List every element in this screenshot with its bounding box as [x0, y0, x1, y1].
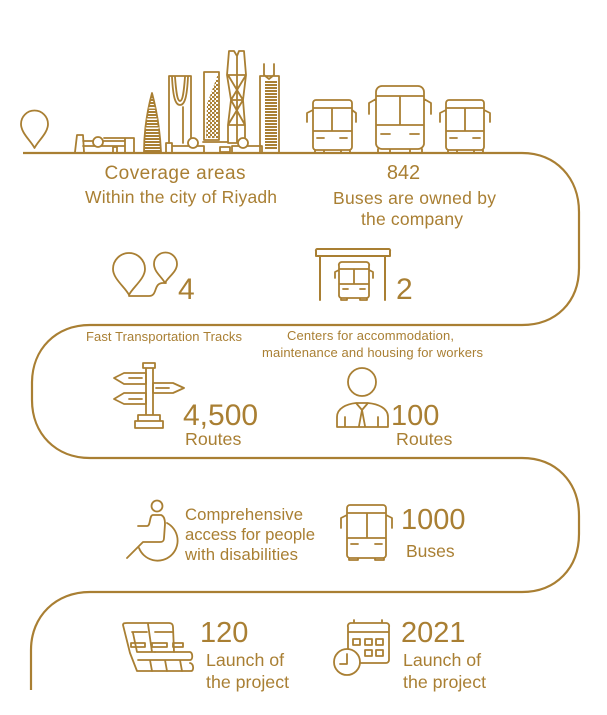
text: launch of the project: [206, 650, 289, 692]
number: 2021: 2021: [401, 617, 466, 649]
number: 1000: 1000: [401, 504, 466, 536]
icon: bus seats: [123, 623, 193, 671]
icon: three buses: [307, 86, 490, 152]
icon: bus depot: [316, 249, 390, 300]
number: 842: 842: [387, 162, 420, 184]
icon: two pins with track: [113, 252, 177, 296]
winding route line: [23, 153, 579, 690]
text: launch of the project: the project: [403, 672, 486, 692]
bus left: [307, 100, 356, 152]
text: comprehensive access: [184, 505, 315, 564]
text: within the city of Riyadh: Within the city of Riyadh: [85, 187, 277, 207]
text: launch of the project: Launch of: [403, 650, 481, 670]
number: 100: 100: [391, 400, 439, 432]
text: launch of the project: the project: [206, 672, 289, 692]
text: comprehensive access: Comprehensive: [185, 505, 303, 524]
icon: wheelchair user: [127, 500, 178, 561]
label: routes: Routes: [185, 429, 241, 449]
label: buses: Buses: [406, 541, 455, 561]
text: launch of the project: Launch of: [206, 650, 284, 670]
bus centre: [369, 86, 431, 152]
number: 4,500: 4,500: [183, 399, 258, 432]
label: centers for accommodation: [262, 328, 484, 360]
icon: calendar and clock: [334, 620, 389, 675]
label: centers for accommodation: Centers for accommodation,: [287, 328, 454, 343]
text: comprehensive access: access for people: [185, 525, 315, 544]
number: 2: 2: [396, 273, 413, 306]
text: comprehensive access: with disabilities: [184, 545, 298, 564]
label: fast transportation tracks: Fast Transportation Tracks: [86, 329, 242, 344]
icon: signpost: [114, 363, 184, 428]
text: buses are owned by the company: Buses are owned by: [333, 188, 496, 208]
label: routes: Routes: [396, 429, 452, 449]
number: 4: 4: [178, 273, 195, 306]
heading: coverage areas: Coverage areas: [104, 163, 246, 184]
number: 120: 120: [200, 617, 248, 649]
text: launch of the project: [403, 650, 486, 692]
icon: bus: [341, 505, 392, 560]
icon: worker: [337, 368, 388, 427]
text: buses are owned by the company: [333, 188, 496, 229]
bus right: [440, 100, 490, 152]
label: centers for accommodation: maintenance and housing for workers: [262, 345, 484, 360]
text: buses are owned by the company: the company: [361, 209, 463, 229]
icon: Riyadh skyline: [75, 51, 279, 152]
icon: location pin: [21, 110, 48, 148]
